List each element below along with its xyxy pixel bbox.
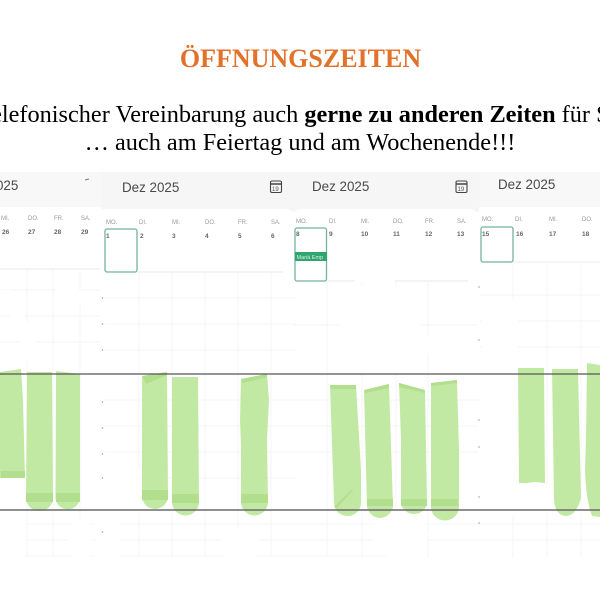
panel: calendar week 4: 16 [516,231,524,238]
icon: calendar: 19 [272,187,279,193]
panel: calendar week 1: DO. [28,216,39,222]
month heading: Dez 2025 [498,177,555,192]
panel: calendar week 2: 1 [106,233,110,240]
icon: calendar [456,181,467,193]
panel: calendar week 3: 9 [329,231,333,238]
panel: calendar week 3: 13 [457,231,465,238]
opening hours top line [0,373,600,375]
panel: calendar week 4: DO. [582,217,593,223]
panel: calendar week 4: MO. [482,217,494,223]
bars week 2 [142,372,269,516]
text block: appointment note line 2: … auch am Feiertag und am Wochenende!!! [85,129,515,156]
panel: calendar week 1: 26 [2,229,10,236]
bars week 3 [330,380,459,520]
panel: calendar week 1: 27 [28,229,36,236]
panel: calendar week 2 [102,172,296,558]
panel: calendar week 2: 3 [172,233,176,240]
panel: calendar week 4: MI. [549,217,558,223]
title: ÖFFNUNGSZEITEN [180,44,421,73]
panel: calendar week 3: MI. [361,219,370,225]
panel: calendar week 3: 12 [425,231,433,238]
panel: calendar week 3: 11 [393,231,400,238]
panel: calendar week 1: FR. [54,216,64,222]
panel: calendar week 3: FR. [425,219,435,225]
icon: calendar [270,181,282,193]
panel: calendar week 3: 8 [296,231,300,238]
panel: calendar week 1: MI. [1,216,10,222]
bars week 4 [518,363,600,517]
month heading: Dez 2025 [122,180,179,195]
selected day with event: Mariá Emp [296,255,323,261]
panel: calendar week 2: 4 [205,233,209,240]
icon: calendar: 19 [458,187,465,193]
panel: calendar week 3: 10 [361,231,369,238]
selected day [481,227,513,262]
selected day [105,229,137,272]
panel: calendar week 1: 29 [81,229,89,236]
marker overlap bands [1,372,458,508]
retouched white areas [0,284,549,563]
panel: calendar week 2: SA. [271,220,281,226]
chart: highlighted opening hours [0,363,600,520]
panel: calendar week 4: DI. [515,217,523,223]
panel: calendar week 4: 18 [582,231,590,238]
panel: calendar week 2: MI. [172,220,181,226]
selected day with event [295,228,327,281]
panel: calendar week 3: DI. [329,219,337,225]
panel: calendar week 2: DI. [139,220,147,226]
panel: calendar week 2: MO. [106,220,118,226]
panel: calendar week 2: 5 [238,233,242,240]
panel: calendar week 4 [420,172,600,558]
panel: calendar week 1: 28 [54,229,62,236]
panel: calendar week 2: FR. [238,220,248,226]
panel: calendar week 1 [0,172,102,558]
panel: calendar week 3: DO. [393,219,404,225]
panel: calendar week 2: 2 [140,233,144,240]
panel: calendar week 1: SA. [81,216,91,222]
panel: calendar week 2: 6 [271,233,275,240]
panel: calendar week 2: DO. [205,220,216,226]
panel: calendar week 4: 15 [482,231,490,238]
panel: calendar week 4: 17 [549,231,557,238]
month heading: Dez 2025 [312,179,369,194]
panel: calendar week 3: MO. [296,219,308,225]
hour ticks [102,286,480,533]
opening hours bottom line [0,509,600,511]
panel: calendar week 3 [255,172,480,558]
bars week 1 [0,369,80,511]
panel: calendar week 3: SA. [457,219,467,225]
